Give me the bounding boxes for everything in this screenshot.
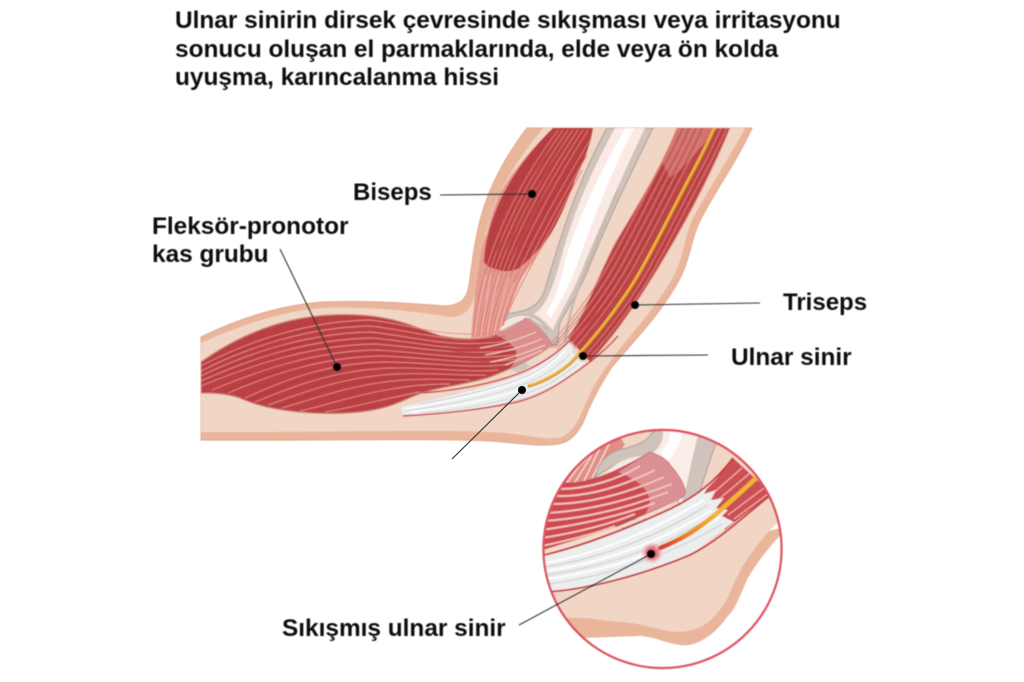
inset flexor muscle xyxy=(535,452,685,552)
tendon sheath: red outlines xyxy=(403,310,618,416)
title xyxy=(175,7,841,91)
inset nerve xyxy=(660,477,757,548)
label: Sıkışmış ulnar sinir xyxy=(282,550,655,642)
inset triceps xyxy=(704,458,768,530)
muscle: triceps xyxy=(548,114,730,362)
nerve: ulnar nerve xyxy=(529,120,718,386)
muscle: flexor-pronator group xyxy=(201,315,552,413)
label: Fleksör-pronotor kas grubu xyxy=(152,213,349,371)
title: uyuşma, karıncalanma hissi xyxy=(175,64,499,91)
label: Fleksör-pronotor kas grubu: kas grubu xyxy=(152,241,269,268)
inset compression spot xyxy=(641,542,663,564)
bones: humerus and joint xyxy=(493,128,653,373)
label: Fleksör-pronotor kas grubu: Fleksör-pronotor xyxy=(152,213,349,240)
title: sonucu oluşan el parmaklarında, elde veya ön kolda xyxy=(175,36,779,63)
title: Ulnar sinirin dirsek çevresinde sıkışması veya irritasyonu xyxy=(175,7,841,34)
inset skin strip under flexor xyxy=(548,516,646,552)
skin: outer layer xyxy=(201,128,752,445)
tendon: white common tendon xyxy=(400,341,586,415)
inset sheath lines xyxy=(540,458,772,592)
label: Sıkışmış ulnar sinir: Sıkışmış ulnar sinir xyxy=(282,615,506,642)
main arm illustration xyxy=(201,114,752,445)
inset biceps fibres xyxy=(565,438,626,484)
skin: inner layer xyxy=(201,128,745,438)
label: Ulnar sinir xyxy=(579,344,852,371)
inset circle: compressed ulnar nerve xyxy=(535,425,790,668)
label: Ulnar sinir: Ulnar sinir xyxy=(731,344,852,371)
label: Triseps: Triseps xyxy=(783,289,867,316)
inset circle border xyxy=(544,430,782,668)
label: Biseps: Biseps xyxy=(353,179,432,206)
label: Biseps xyxy=(353,179,536,206)
inset tendon xyxy=(540,486,734,592)
inset bones xyxy=(595,425,722,530)
muscle: biceps xyxy=(471,128,593,338)
inset skin outer layer xyxy=(566,528,780,646)
leader: unlabeled tendon pointer xyxy=(452,386,526,459)
inset skin xyxy=(544,431,778,632)
label: Triseps xyxy=(631,289,867,316)
